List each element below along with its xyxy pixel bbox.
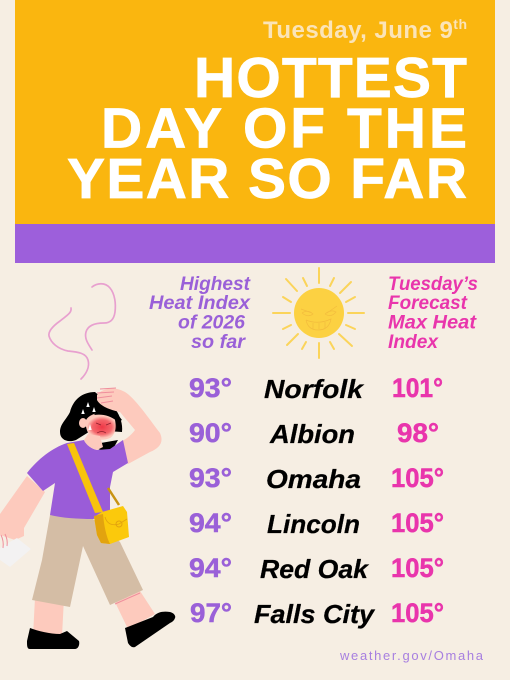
row: Omaha [189, 463, 444, 494]
row: Red Oak: Red Oak [260, 554, 370, 584]
column heading: forecast max heat index: Tuesday’s [388, 274, 478, 295]
yellow bag [94, 506, 129, 544]
row: Lincoln: 94° [189, 508, 232, 538]
bangs [94, 407, 122, 422]
front leg and shoe [114, 591, 175, 647]
under-chin hair [95, 440, 118, 451]
column heading: forecast max heat index: Index [388, 332, 439, 353]
title [67, 46, 467, 211]
bag strap [67, 443, 103, 513]
hair [60, 392, 122, 441]
flushed cheeks [87, 416, 117, 438]
illustration: overheated woman walking [0, 388, 175, 649]
row: Norfolk [189, 373, 443, 404]
table: heat index by city [189, 373, 444, 629]
row: Albion: 90° [189, 418, 232, 448]
trousers [32, 515, 143, 607]
row: Lincoln: Lincoln [267, 509, 360, 539]
ear [79, 418, 87, 428]
row: Albion [189, 418, 439, 449]
tissue [0, 538, 31, 567]
column heading: forecast max heat index: Max Heat [388, 312, 477, 334]
row: Norfolk: 101° [392, 373, 443, 403]
row: Norfolk: 93° [189, 373, 232, 403]
back leg and shoe [27, 598, 79, 649]
row: Red Oak: 105° [391, 553, 444, 583]
header banner [15, 0, 495, 224]
row: Falls City: Falls City [254, 599, 376, 629]
face [86, 413, 116, 440]
title: YEAR SO FAR [67, 147, 467, 211]
title: HOTTEST [194, 46, 467, 110]
date: th [453, 16, 467, 32]
row: Albion: 98° [397, 418, 439, 448]
row: Omaha: 93° [189, 463, 232, 493]
column heading: forecast max heat index [388, 274, 478, 353]
column heading: highest heat index [149, 274, 251, 353]
back arm [0, 476, 45, 540]
row: Falls City [190, 598, 444, 629]
column heading: highest heat index: so far [191, 332, 247, 353]
column heading: highest heat index: of 2026 [178, 312, 245, 334]
raised arm [97, 388, 162, 464]
row: Red Oak [189, 553, 444, 584]
row: Lincoln: 105° [391, 508, 444, 538]
icon: heat wave squiggles [49, 284, 115, 379]
row: Norfolk: Norfolk [264, 374, 365, 404]
row: Falls City: 105° [391, 598, 444, 628]
bag back strap [108, 488, 119, 505]
date: Tuesday, June 9 [263, 17, 453, 44]
column heading: highest heat index: Highest [180, 274, 251, 295]
row: Omaha: Omaha [266, 464, 361, 494]
column heading: forecast max heat index: Forecast [388, 293, 468, 314]
row: Omaha: 105° [391, 463, 444, 493]
column heading: highest heat index: Heat Index [149, 293, 251, 314]
purple band [15, 224, 495, 263]
row: Albion: Albion [269, 419, 355, 449]
sweat drops [81, 402, 96, 430]
title: DAY OF THE [101, 96, 467, 160]
icon: sun [273, 268, 364, 358]
row: Lincoln [189, 508, 444, 539]
t-shirt [27, 440, 128, 519]
source url: weather.gov/Omaha [339, 648, 484, 663]
row: Falls City: 97° [190, 598, 232, 628]
row: Red Oak: 94° [189, 553, 232, 583]
